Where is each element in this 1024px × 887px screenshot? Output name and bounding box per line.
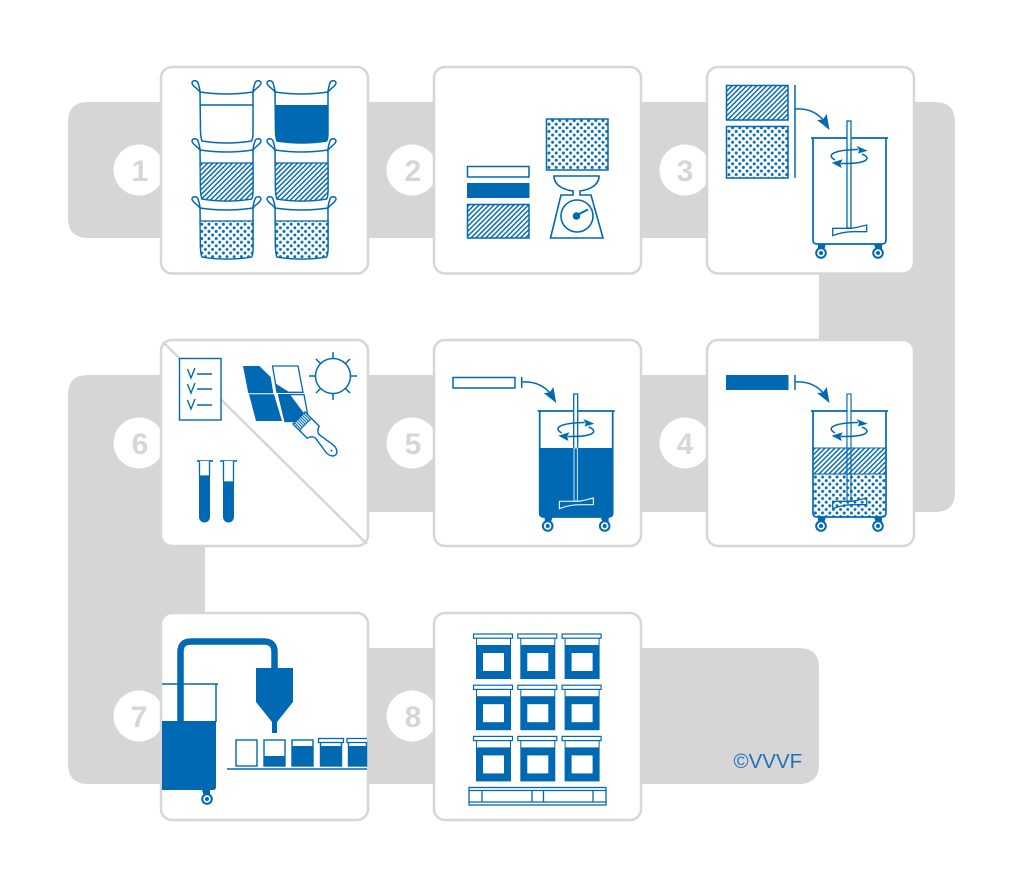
step number badge 7: 7 bbox=[131, 701, 147, 734]
icon: bag with solid blue fill bbox=[267, 81, 336, 143]
panel: step 5 adding white component bbox=[434, 340, 641, 546]
step number badge 8: 8 bbox=[405, 701, 421, 734]
icon: weighing scale bbox=[550, 176, 603, 238]
icon: empty bag with white fill line bbox=[192, 81, 261, 143]
panel: step 3 mixing powders bbox=[707, 67, 914, 274]
arrow into tank bbox=[522, 382, 556, 403]
white ingredient block bbox=[468, 166, 529, 177]
bracket line bbox=[794, 375, 796, 390]
icon: bag with dotted fill, right bbox=[267, 197, 336, 259]
step number badge 4 bbox=[660, 418, 710, 468]
dotted ingredient block on scale bbox=[546, 119, 608, 170]
bracket line bbox=[794, 85, 796, 178]
arrow into tank bbox=[795, 109, 830, 130]
hatched ingredient block bbox=[468, 204, 529, 238]
panel: step 2 weighing bbox=[434, 67, 641, 274]
step number badge 3: 3 bbox=[677, 155, 693, 188]
icon: sun bbox=[309, 352, 357, 400]
jar: empty bbox=[236, 740, 257, 766]
icon: bag with hatched fill, left bbox=[192, 139, 261, 201]
jar row 1 bbox=[474, 634, 601, 679]
icon: pallet bbox=[469, 788, 606, 805]
icon: bag with hatched fill, right bbox=[267, 139, 336, 201]
arrow into tank bbox=[795, 382, 830, 403]
icon: test tube left bbox=[197, 461, 213, 522]
icon: filling hopper bbox=[256, 668, 293, 733]
bracket line bbox=[521, 377, 523, 388]
step number badge 6: 6 bbox=[132, 428, 148, 461]
copyright label: ©VVVF bbox=[734, 750, 802, 773]
step number badge 2: 2 bbox=[405, 155, 421, 188]
step number badge 7 bbox=[114, 690, 164, 742]
jar: full bbox=[292, 740, 314, 766]
dotted ingredient block bbox=[726, 126, 788, 178]
icon: bag with dotted fill, left bbox=[192, 197, 261, 259]
step number badge 5 bbox=[386, 418, 438, 468]
panel: step 6 quality control bbox=[161, 340, 368, 546]
conveyor line bbox=[227, 768, 367, 770]
icon: transfer pipe bbox=[180, 642, 274, 722]
icon: painted test panel bbox=[243, 366, 309, 422]
jar: partly filled bbox=[264, 740, 286, 766]
jar row 2 bbox=[474, 685, 601, 730]
diagonal divider bbox=[163, 342, 367, 544]
hatched ingredient block bbox=[726, 86, 788, 120]
blue ingredient block bbox=[726, 375, 788, 390]
step number badge 5: 5 bbox=[405, 428, 421, 461]
jar row 3 bbox=[474, 736, 601, 781]
process path: grey serpentine band bbox=[68, 102, 955, 784]
step number badge 4: 4 bbox=[677, 428, 694, 461]
step number badge 1: 1 bbox=[132, 155, 148, 188]
jar: full with lid bbox=[318, 738, 344, 766]
panel: step 4 adding blue component bbox=[707, 340, 914, 546]
icon: mixing tank bbox=[811, 121, 888, 258]
panel: step 8 finished pallet bbox=[434, 613, 641, 820]
icon: mixing tank with solid blue contents bbox=[538, 394, 615, 531]
icon: checklist bbox=[180, 358, 221, 420]
step number badge 6 bbox=[114, 418, 164, 468]
blue ingredient block bbox=[467, 183, 530, 198]
step number badge 8 bbox=[386, 690, 438, 742]
step number badge 1 bbox=[114, 144, 164, 196]
panel: step 7 filling line bbox=[161, 613, 368, 820]
icon: mixing tank feeding the pipe bbox=[162, 684, 218, 804]
icon: paint brush bbox=[293, 412, 342, 461]
icon: mixing tank with hatched and dotted contents bbox=[811, 394, 888, 531]
jar: full with lid, cropped by panel bbox=[347, 738, 367, 766]
icon: test tube right bbox=[220, 461, 237, 522]
step number badge 3 bbox=[660, 144, 710, 196]
white ingredient block bbox=[453, 378, 515, 388]
panel: step 1 raw material bags bbox=[161, 67, 368, 274]
step number badge 2 bbox=[386, 144, 438, 196]
